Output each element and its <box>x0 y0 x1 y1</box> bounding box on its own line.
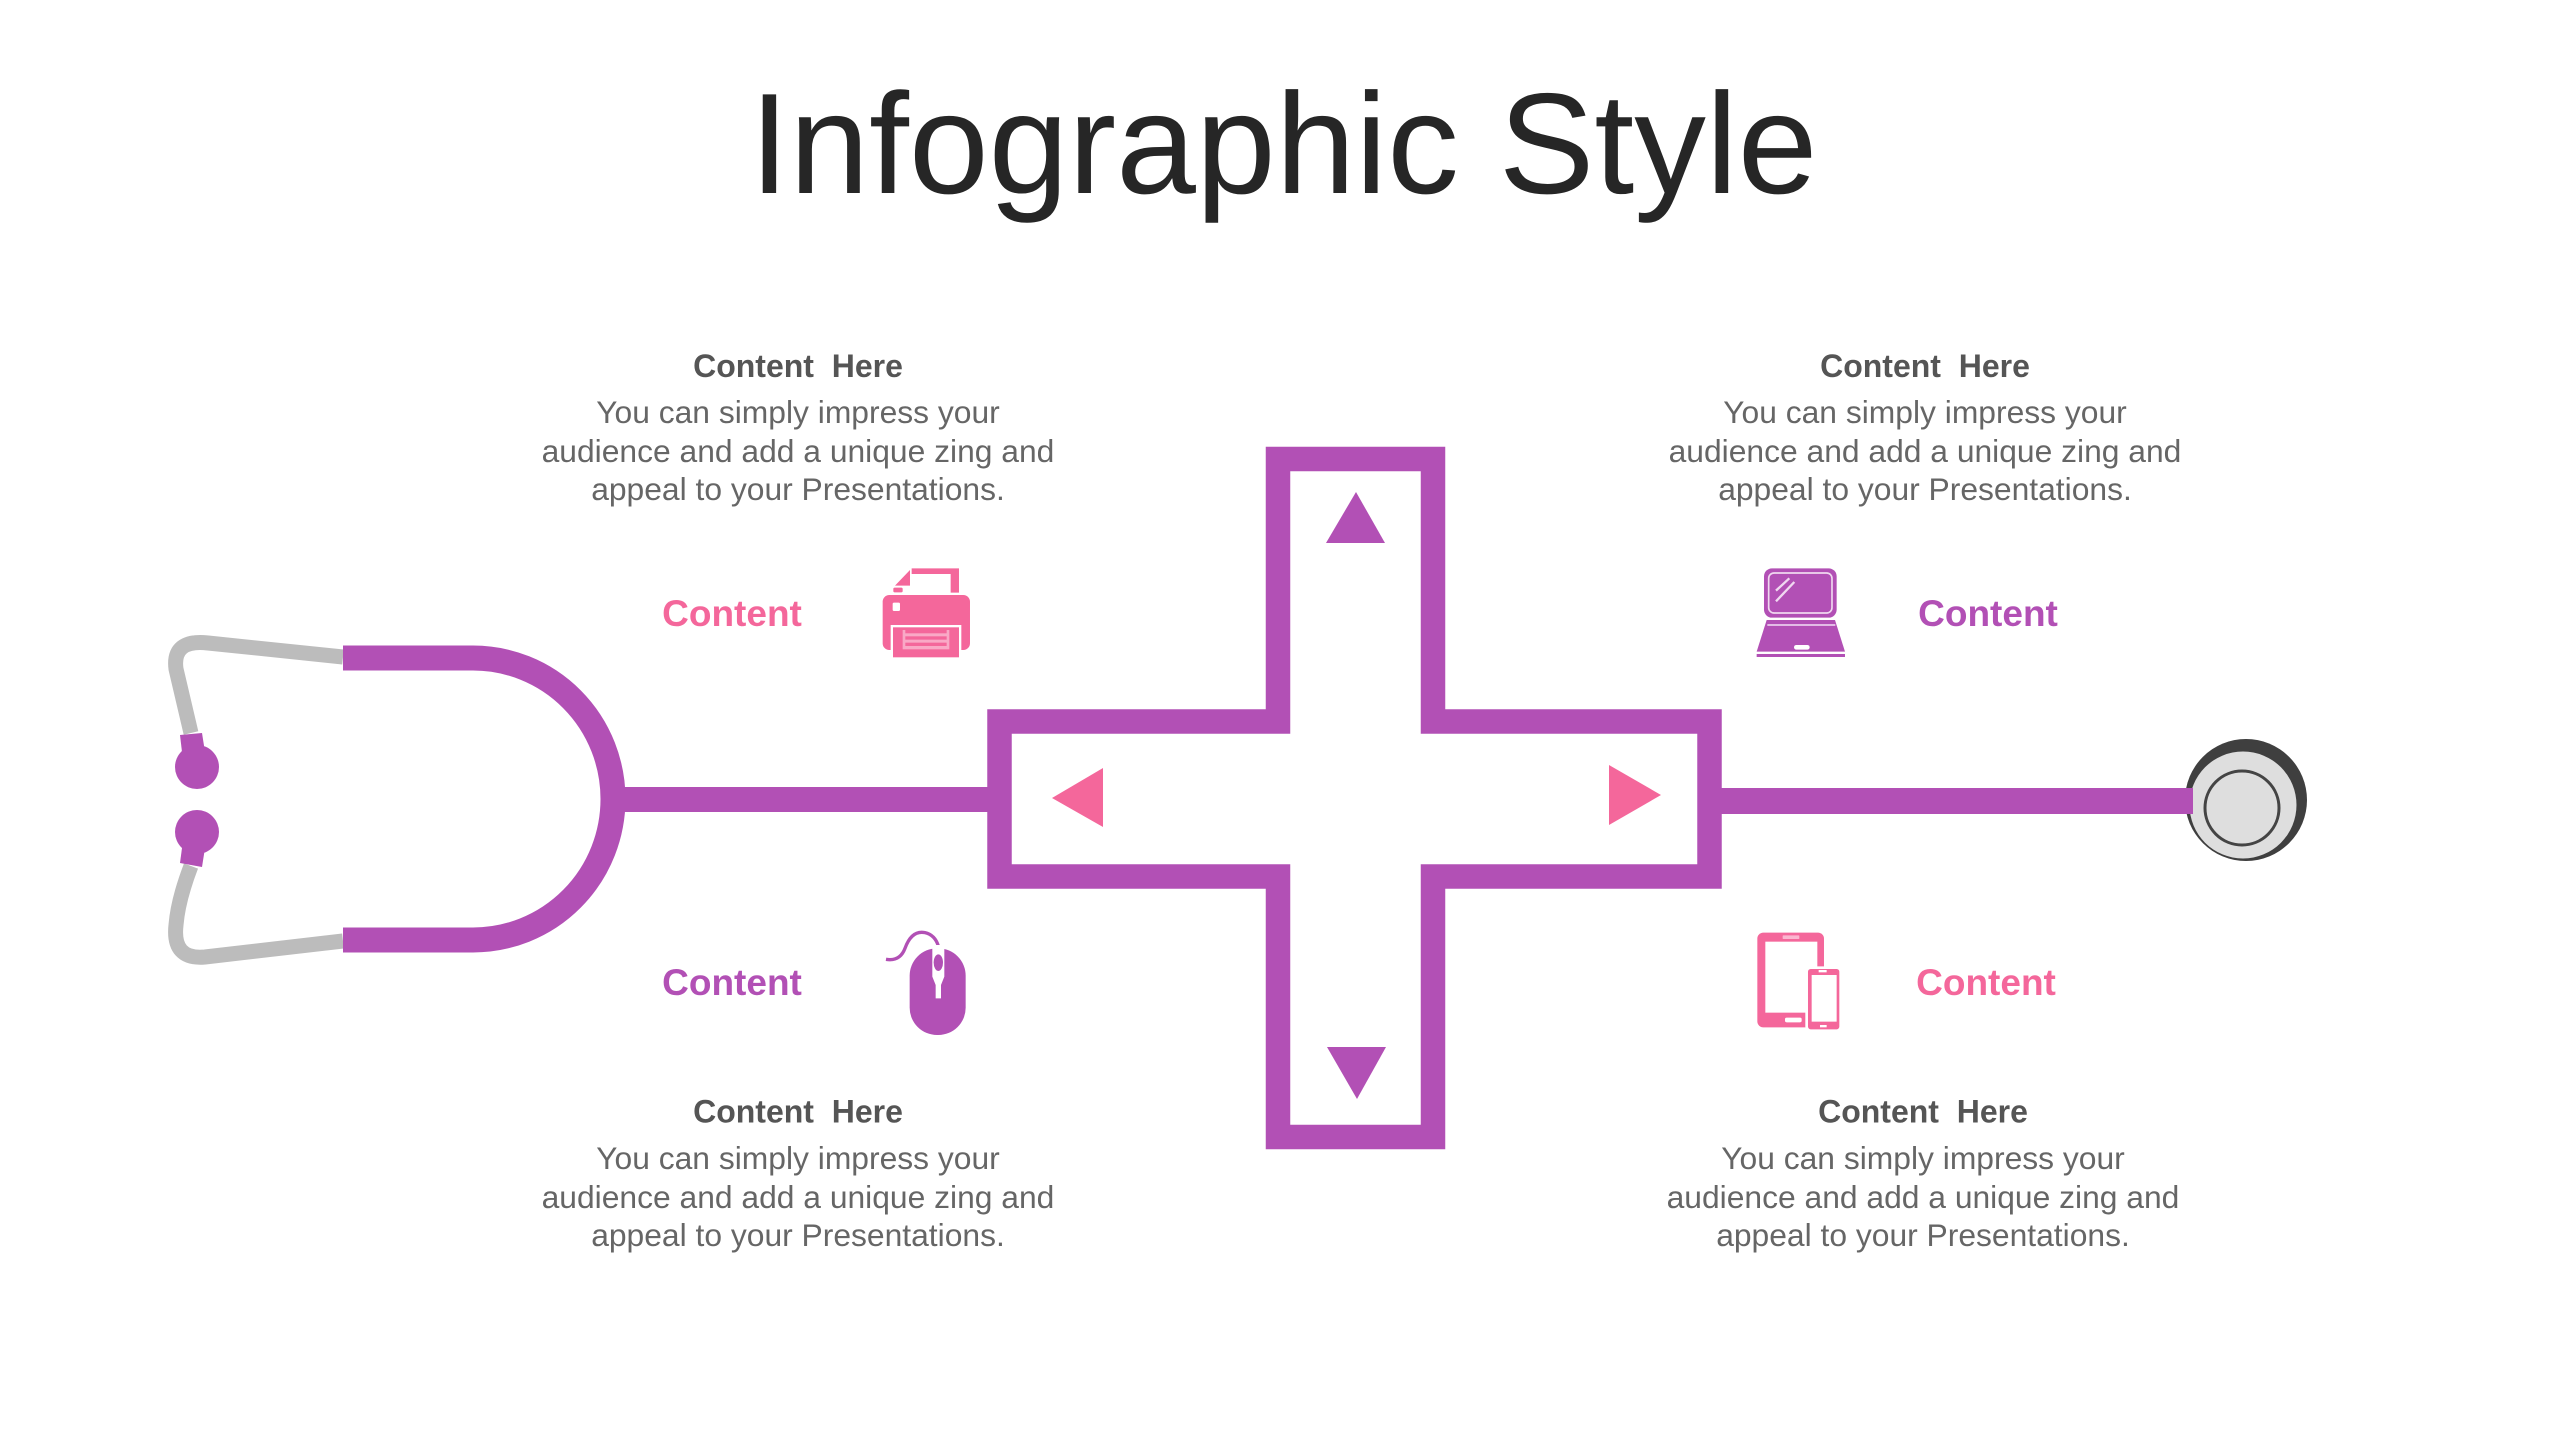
text block: bottom right: audience and add a unique zing and <box>1667 1179 2179 1215</box>
text block: top right <box>1669 348 2181 507</box>
text block: top right: appeal to your Presentations. <box>1718 471 2132 507</box>
label: top right: Content <box>1918 593 2058 634</box>
text block: bottom right: Content Here <box>1818 1094 2028 1130</box>
text block: top right: You can simply impress your <box>1723 394 2127 430</box>
text block: top left: Content Here <box>693 348 903 384</box>
stethoscope <box>175 643 2307 957</box>
text block: top right: Content Here <box>1820 348 2030 384</box>
text block: top left: appeal to your Presentations. <box>591 471 1005 507</box>
text block: bottom left: audience and add a unique zing and <box>542 1179 1054 1215</box>
stethoscope: gray ear tubes <box>176 643 343 957</box>
stethoscope: purple headset tube <box>343 658 613 940</box>
stethoscope: left stem <box>620 787 990 812</box>
label: bottom right: Content <box>1916 962 2056 1003</box>
text block: top left <box>542 348 1054 507</box>
text block: bottom right <box>1667 1094 2179 1253</box>
icon: laptop <box>1757 568 1845 657</box>
medical cross outline <box>1000 459 1710 1137</box>
text block: top left: audience and add a unique zing and <box>542 433 1054 469</box>
icon: tablet and phone <box>1757 933 1841 1031</box>
text block: bottom left: appeal to your Presentations. <box>591 1217 1005 1253</box>
title: Infographic Style <box>750 64 1817 224</box>
stethoscope: chest piece <box>2180 739 2307 861</box>
icon: mouse <box>886 932 966 1035</box>
text block: bottom right: You can simply impress your <box>1721 1140 2125 1176</box>
icon: printer <box>883 568 970 658</box>
text block: bottom left <box>542 1094 1054 1253</box>
label: top left: Content <box>662 593 802 634</box>
text block: top left: You can simply impress your <box>596 394 1000 430</box>
text block: bottom left: Content Here <box>693 1094 903 1130</box>
label: bottom left: Content <box>662 962 802 1003</box>
stethoscope: right stem <box>1720 788 2193 814</box>
arrow: down <box>1327 1047 1386 1099</box>
stethoscope: ear tips <box>175 733 219 867</box>
text block: top right: audience and add a unique zing and <box>1669 433 2181 469</box>
text block: bottom left: You can simply impress your <box>596 1140 1000 1176</box>
arrow: right <box>1609 765 1661 825</box>
arrow: up <box>1326 492 1385 543</box>
text block: bottom right: appeal to your Presentations. <box>1716 1217 2130 1253</box>
arrow: left <box>1052 768 1103 827</box>
